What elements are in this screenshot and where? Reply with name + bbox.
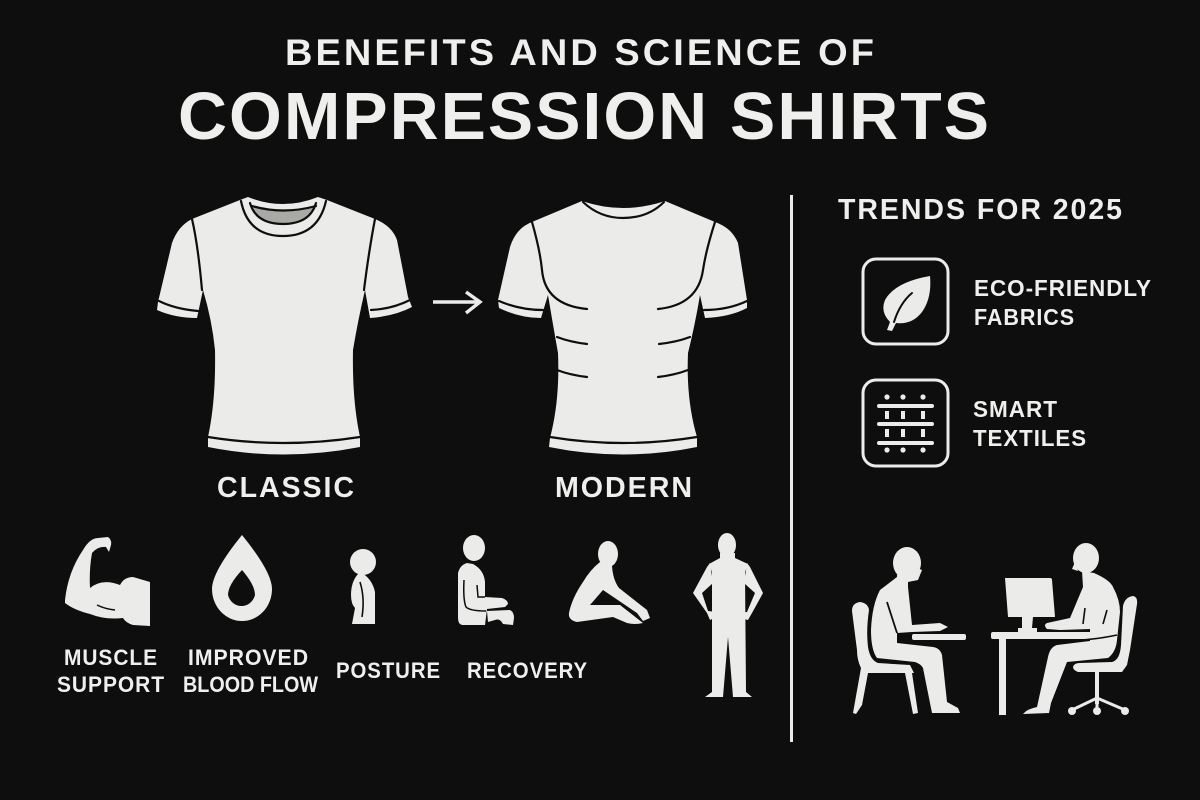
icon: office workers seated bbox=[852, 543, 1137, 715]
label: classic: CLASSIC bbox=[217, 472, 356, 504]
icon: left person bbox=[871, 547, 960, 713]
label: smart textiles: TEXTILES bbox=[973, 425, 1087, 451]
label: improved blood flow: IMPROVED bbox=[188, 645, 309, 670]
icon: left chair bbox=[852, 602, 918, 714]
icon: office chair bbox=[1068, 596, 1137, 715]
title: BENEFITS AND SCIENCE OF bbox=[285, 32, 877, 73]
label: muscle support: SUPPORT bbox=[57, 672, 165, 697]
label: eco-friendly fabrics bbox=[974, 275, 1152, 330]
panel: benefit icons bbox=[57, 533, 763, 697]
icon: desk with monitor bbox=[991, 578, 1117, 715]
icon: flexed arm bbox=[65, 537, 150, 626]
label: recovery: RECOVERY bbox=[467, 658, 588, 683]
icon: standing figure bbox=[693, 533, 763, 697]
panel: trends for 2025 bbox=[838, 194, 1152, 715]
heading: trends: TRENDS FOR 2025 bbox=[838, 194, 1124, 226]
label: improved blood flow bbox=[183, 645, 318, 697]
icon: seated upright figure bbox=[458, 535, 514, 625]
left table edge bbox=[912, 634, 966, 640]
panel: shirt comparison bbox=[157, 197, 747, 504]
label: smart textiles bbox=[973, 396, 1087, 451]
label: eco-friendly fabrics: ECO-FRIENDLY bbox=[974, 275, 1152, 301]
icon: leaf bbox=[863, 259, 948, 344]
classic t-shirt bbox=[157, 197, 412, 454]
label: smart textiles: SMART bbox=[973, 396, 1058, 422]
label: posture: POSTURE bbox=[336, 658, 441, 683]
label: muscle support bbox=[57, 645, 165, 697]
icon: blood drop bbox=[212, 535, 272, 621]
modern compression shirt bbox=[498, 201, 747, 454]
icon: posture figure bbox=[350, 549, 376, 624]
arrow bbox=[433, 292, 480, 313]
label: improved blood flow: BLOOD FLOW bbox=[183, 672, 318, 697]
icon: right person bbox=[1023, 543, 1120, 714]
title: COMPRESSION SHIRTS bbox=[178, 79, 991, 154]
label: modern: MODERN bbox=[555, 472, 694, 504]
title bbox=[178, 32, 991, 154]
label: muscle support: MUSCLE bbox=[64, 645, 158, 670]
icon: smart textile grid bbox=[863, 380, 948, 466]
label: eco-friendly fabrics: FABRICS bbox=[974, 304, 1075, 330]
icon: stretching figure bbox=[569, 541, 650, 624]
